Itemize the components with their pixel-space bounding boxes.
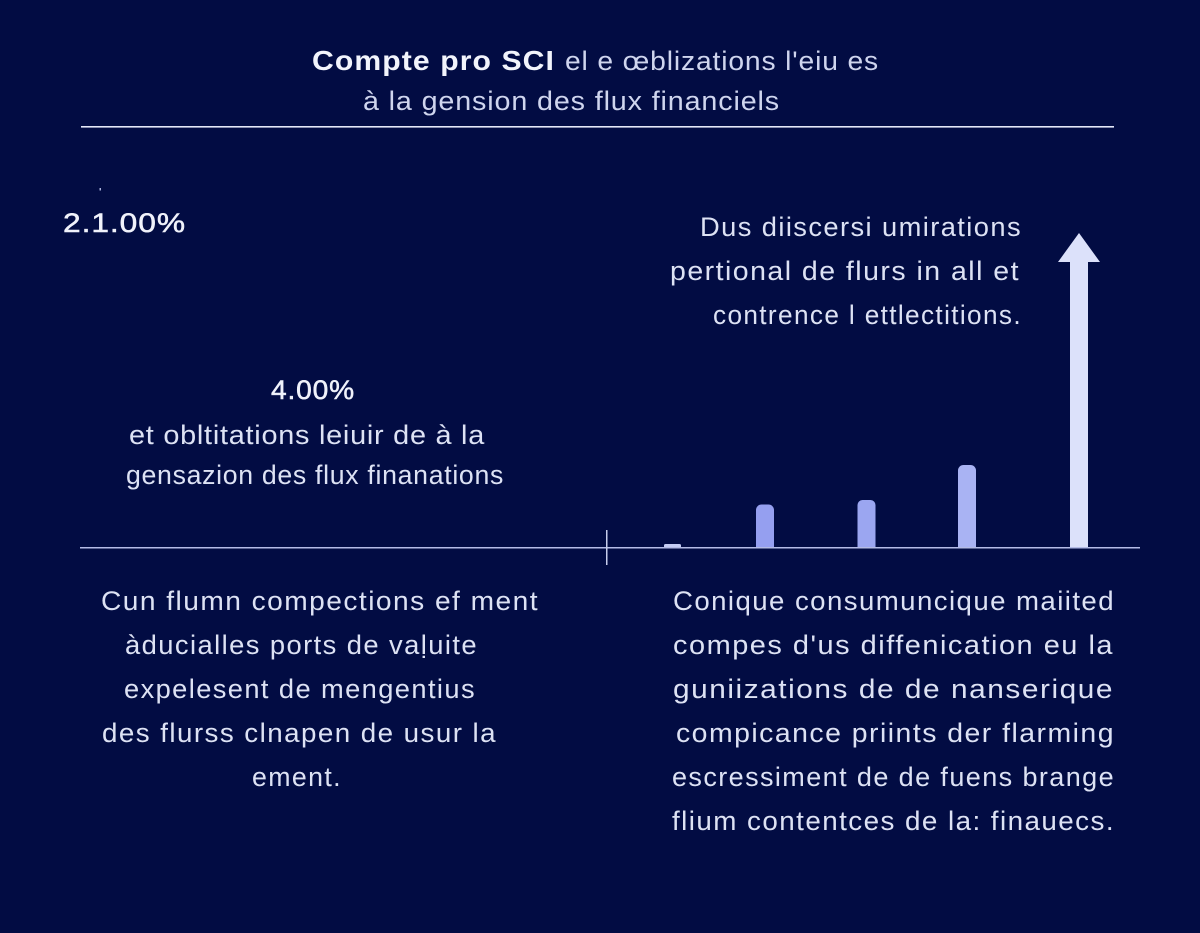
title: à la gension des flux financiels (363, 86, 780, 116)
title: el e œblizations l'eiu es (565, 46, 879, 76)
arrow (1058, 233, 1100, 548)
bar 2 (756, 504, 774, 548)
text block: chart annotation: Dus diiscersi umirations (700, 212, 1022, 242)
text block: 4.00% callout: et obltitations leiuir de à la (129, 420, 485, 450)
text block: 4.00% callout (126, 375, 504, 490)
text block: bottom right: flium contentces de la: finauecs. (672, 806, 1115, 836)
text block: bottom right: compes d'us diffenication eu la (673, 630, 1114, 660)
text block: bottom left: Cun flumn compections ef ment (101, 586, 539, 616)
title (312, 45, 879, 116)
statistic: 2.1.00%: 2.1.00% (63, 208, 186, 238)
text block: 4.00% callout: 4.00% (271, 375, 355, 405)
text block: bottom left: des flurss clnapen de usur la (102, 718, 497, 748)
text block: bottom right: escressiment de de fuens brange (672, 762, 1115, 792)
bar 1 (664, 544, 681, 548)
text block: chart annotation (670, 212, 1022, 330)
text block: bottom right: guniizations de de nanserique (673, 674, 1114, 704)
axis (80, 547, 1140, 548)
bar 4 (958, 465, 976, 548)
text block: bottom right (672, 586, 1115, 836)
text block: bottom left: àducialles ports de vaḷuite (125, 630, 478, 660)
text block: bottom left: ement. (252, 762, 342, 792)
text block: bottom right: compicance priints der flarming (676, 718, 1115, 748)
text block: 4.00% callout: gensazion des flux finanations (126, 460, 504, 490)
bar 3 (858, 500, 876, 548)
bar chart (80, 233, 1140, 565)
title: Compte pro SCI (312, 45, 555, 76)
decorative speck marker (100, 188, 101, 190)
text block: chart annotation: pertional de flurs in all et (670, 256, 1020, 286)
text block: chart annotation: contrence l ettlectitions. (713, 300, 1022, 330)
axis tick (606, 530, 608, 565)
text block: bottom left: expelesent de mengentius (124, 674, 476, 704)
text block: bottom left (101, 586, 539, 792)
text block: bottom right: Conique consumuncique maiited (673, 586, 1115, 616)
